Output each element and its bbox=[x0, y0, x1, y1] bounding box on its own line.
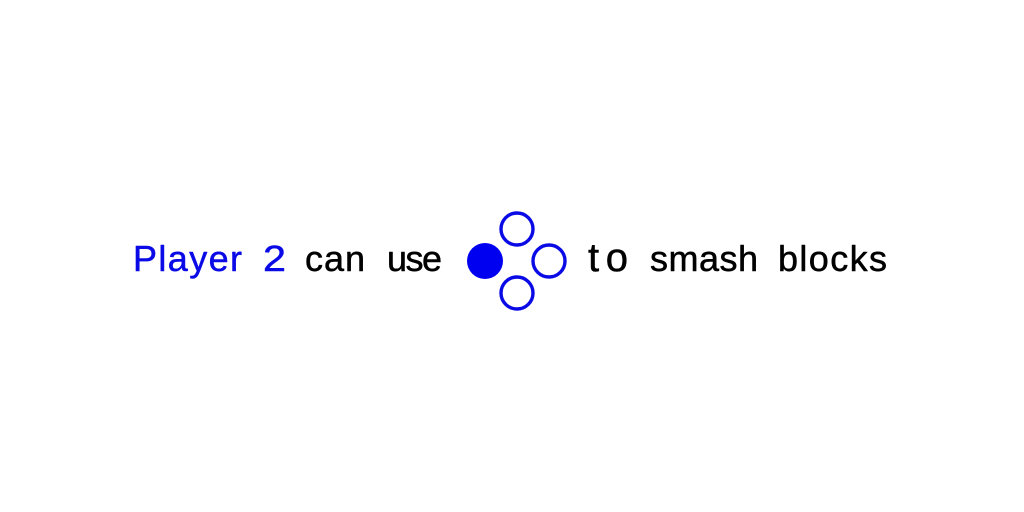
text: can use bbox=[305, 238, 442, 279]
text: to smash blocks: blocks bbox=[778, 238, 887, 279]
icon: button diamond with left button filled bbox=[467, 213, 565, 309]
text: to smash blocks: smash bbox=[650, 238, 758, 279]
bottom button bbox=[501, 277, 533, 309]
text: can use: use bbox=[387, 238, 442, 279]
text: Player 2: Player bbox=[133, 238, 242, 279]
top button bbox=[501, 213, 533, 245]
text: can use: can bbox=[305, 238, 365, 279]
text: to smash blocks bbox=[588, 236, 887, 280]
right button bbox=[533, 245, 565, 277]
left button (filled) bbox=[467, 243, 503, 279]
text: Player 2: 2 bbox=[263, 238, 286, 279]
text: to smash blocks: to bbox=[588, 236, 628, 280]
